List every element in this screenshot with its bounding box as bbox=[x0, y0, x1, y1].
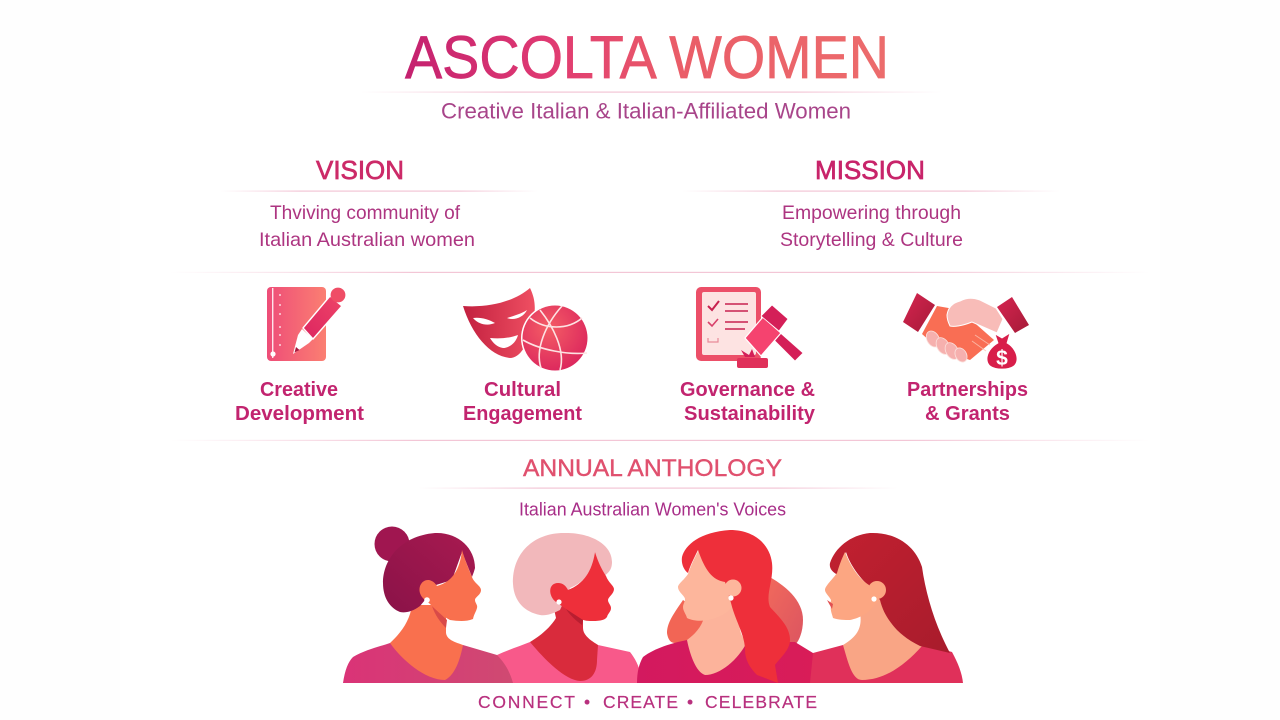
woman 4: long dark red hair bbox=[810, 533, 963, 683]
icon: handshake and money bag: $ bbox=[996, 347, 1008, 370]
tagline: • bbox=[687, 692, 693, 712]
label: governance and sustainability: Governance & bbox=[680, 379, 815, 401]
woman 1: hair bun bbox=[343, 526, 513, 683]
label: governance and sustainability: Sustainability bbox=[684, 403, 816, 425]
tagline: CREATE bbox=[603, 692, 678, 712]
mission heading: MISSION bbox=[815, 155, 925, 185]
vision text: Italian Australian women bbox=[259, 229, 475, 251]
woman 2: pale hair bbox=[490, 533, 642, 683]
panel: mission bbox=[682, 155, 1060, 251]
panel: vision bbox=[220, 155, 538, 251]
woman 3: wavy red hair bbox=[637, 530, 818, 683]
panel: cultural engagement bbox=[463, 288, 589, 425]
label: cultural engagement: Cultural bbox=[484, 379, 561, 401]
panel: partnerships and grants bbox=[903, 293, 1029, 425]
tagline: • bbox=[584, 692, 590, 712]
label: partnerships and grants: Partnerships bbox=[907, 379, 1028, 401]
vision text: Thviving community of bbox=[270, 202, 461, 224]
label: partnerships and grants: & Grants bbox=[925, 403, 1010, 425]
title: ASCOLTA WOMEN bbox=[405, 24, 889, 91]
tagline: CONNECT bbox=[478, 692, 575, 712]
mission text: Empowering through bbox=[782, 202, 961, 224]
label: creative development: Development bbox=[235, 403, 364, 425]
icon: notebook and pencil bbox=[267, 287, 345, 361]
subheading: voices: Italian Australian Women's Voices bbox=[519, 500, 786, 520]
icon: checklist and gavel bbox=[696, 287, 803, 368]
icon: theatre mask and globe bbox=[463, 288, 589, 372]
label: creative development: Creative bbox=[260, 379, 338, 401]
tagline: CELEBRATE bbox=[705, 692, 817, 712]
heading: annual anthology: ANNUAL ANTHOLOGY bbox=[523, 455, 782, 482]
label: cultural engagement: Engagement bbox=[463, 403, 582, 425]
panel: governance and sustainability bbox=[680, 287, 816, 425]
panel: creative development bbox=[235, 287, 364, 425]
illustration: four women in profile bbox=[343, 526, 963, 683]
subtitle: Creative Italian & Italian-Affiliated Women bbox=[441, 98, 851, 124]
vision heading: VISION bbox=[316, 155, 404, 185]
mission text: Storytelling & Culture bbox=[780, 229, 963, 251]
